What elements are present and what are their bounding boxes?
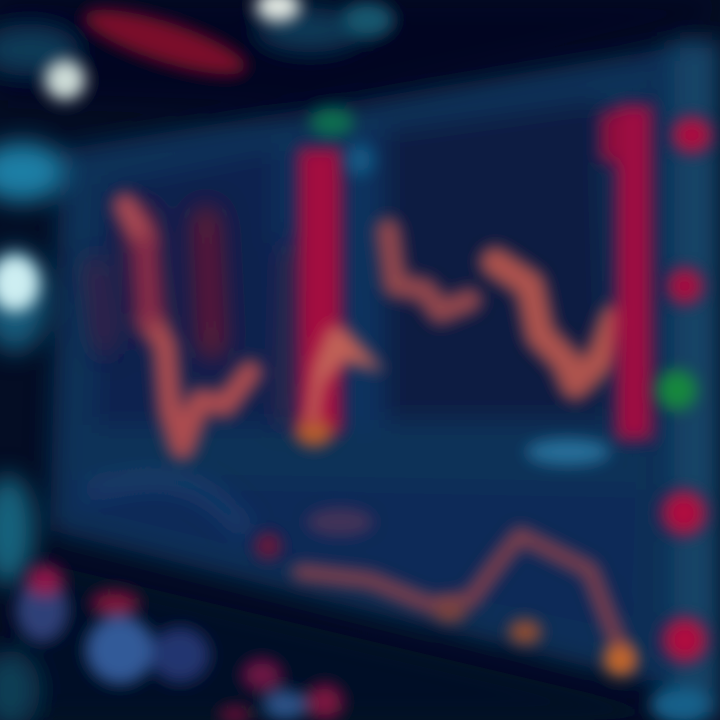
panel: bottom right glow: [650, 687, 710, 720]
panel: top blurred lights: [45, 0, 394, 100]
chart: centre red candle: [298, 148, 342, 433]
panel: left side glow: [0, 24, 80, 720]
panel: right side teal strip: [650, 40, 720, 720]
icon: right side red and green dots: [657, 117, 712, 662]
chart: lower price line: [300, 535, 625, 660]
chart: right red candle: [600, 105, 652, 440]
icon: left white glow: [0, 255, 39, 311]
chart: centre orange peak: [305, 325, 385, 425]
chart: lower left blue line: [90, 480, 245, 530]
chart: lower blue highlight: [526, 439, 610, 465]
chart: left dim bars: [95, 220, 290, 420]
chart: lower mid marks: [255, 508, 636, 676]
chart: left price line: [125, 205, 250, 448]
panel: bottom left blurred cards: [16, 565, 343, 720]
chart: right price line: [495, 262, 615, 385]
chart: centre candle tip: [296, 108, 374, 446]
chart: centre-right price line: [388, 230, 470, 312]
